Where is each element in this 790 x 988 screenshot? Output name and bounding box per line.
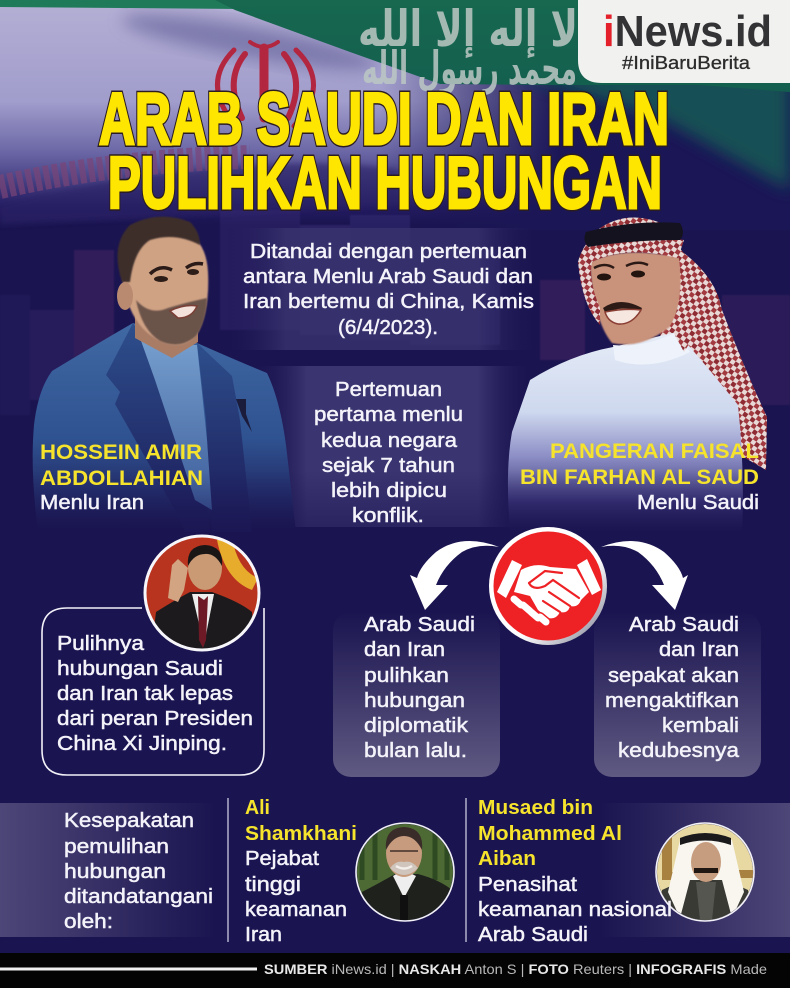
logo: iNews.id — [578, 0, 790, 83]
band intro text — [64, 809, 213, 933]
band: signatories — [0, 803, 790, 937]
caption: Iran minister: Menlu Iran — [40, 491, 144, 514]
name — [245, 796, 357, 845]
panel text: pulihkan — [364, 664, 449, 687]
pocket pen — [236, 399, 252, 432]
text: first meeting: sejak 7 tahun — [322, 454, 455, 477]
arrow: right — [601, 541, 688, 610]
callout text: dari peran Presiden — [57, 707, 253, 730]
name: Aiban — [478, 847, 536, 870]
eyes — [597, 274, 611, 280]
mouth — [605, 309, 641, 324]
panel text: dan Iran — [364, 638, 445, 661]
caption: Iran minister: HOSSEIN AMIR — [40, 441, 202, 464]
role: Penasihat — [478, 873, 577, 896]
role: keamanan — [245, 898, 347, 921]
signatory: Ali Shamkhani — [245, 796, 455, 946]
name: Musaed bin — [478, 796, 593, 819]
role — [478, 873, 672, 946]
badge circle — [489, 527, 607, 645]
logo tagline: #IniBaruBerita — [622, 53, 751, 73]
text: first meeting: Pertemuan — [335, 378, 442, 401]
text: first meeting: pertama menlu — [314, 403, 463, 426]
eyes — [150, 264, 203, 274]
icon: handshake badge — [489, 527, 607, 645]
Iran flag kufic strip — [0, 157, 250, 187]
face — [590, 252, 681, 345]
callout outline — [42, 608, 264, 775]
role: Iran — [245, 923, 282, 946]
text: first meeting — [314, 378, 463, 527]
panel text: kedubesnya — [618, 739, 740, 762]
band intro text: pemulihan — [64, 835, 169, 858]
flag fold shading — [119, 4, 381, 80]
keffiyeh left side — [578, 228, 684, 325]
text: intro: Ditandai dengan pertemuan — [250, 240, 527, 263]
text: intro — [243, 240, 534, 339]
credits: SUMBER iNews.id | NASKAH Anton S | FOTO Reuters | INFOGRAFIS Made — [264, 961, 767, 977]
signatory: Musaed bin Mohammed Al Aiban — [478, 796, 755, 946]
text: first meeting: konflik. — [352, 504, 424, 527]
callout text: hubungan Saudi — [57, 657, 223, 680]
mouth — [170, 306, 197, 318]
Iran emblem — [217, 42, 314, 126]
thobe — [508, 332, 743, 532]
panel text: Arab Saudi — [629, 613, 739, 636]
collar — [613, 332, 690, 364]
callout text: Pulihnya — [57, 632, 145, 655]
name: Ali — [245, 796, 270, 819]
callout text: China Xi Jinping. — [57, 732, 227, 755]
title — [99, 79, 669, 224]
portrait: Pangeran Faisal — [508, 217, 767, 532]
name: Mohammed Al — [478, 822, 622, 845]
caption: Saudi minister: BIN FARHAN AL SAUD — [520, 466, 759, 489]
portrait: Hossein Amir Abdollahian — [33, 217, 296, 532]
text: intro: Iran bertemu di China, Kamis — [243, 290, 534, 313]
keffiyeh back drape — [660, 240, 767, 470]
Saudi flag green field — [215, 0, 790, 92]
text: first meeting: lebih dipicu — [331, 479, 447, 502]
cuffs — [497, 559, 601, 598]
text: intro: antara Menlu Arab Saudi dan — [243, 265, 533, 288]
text: intro: (6/4/2023). — [338, 316, 438, 339]
Saudi flag calligraphy: محمد رسول الله — [362, 41, 577, 95]
photo ring — [145, 536, 259, 650]
name: Shamkhani — [245, 822, 357, 845]
Iran flag red band — [0, 163, 400, 225]
caption: Saudi minister — [520, 440, 759, 514]
panel: embassies — [594, 612, 761, 777]
panel text — [364, 613, 475, 762]
ear — [117, 282, 133, 310]
callout text — [57, 632, 253, 755]
name — [478, 796, 622, 870]
photo ring — [656, 823, 754, 921]
footer bar — [0, 953, 790, 988]
flags backdrop — [0, 0, 790, 230]
caption: Saudi minister: PANGERAN FAISAL — [550, 440, 759, 463]
panel text: Arab Saudi — [364, 613, 475, 636]
panel text: kembali — [662, 714, 739, 737]
band left — [0, 803, 216, 937]
panel text: hubungan — [364, 689, 465, 712]
neck — [135, 310, 198, 358]
centre panel backdrop — [250, 366, 535, 527]
band intro text: Kesepakatan — [64, 809, 194, 832]
panel: restored ties — [333, 612, 500, 777]
caption: Iran minister — [40, 441, 203, 514]
band right — [600, 803, 790, 937]
footer rule — [0, 968, 257, 970]
arrow: left — [410, 541, 499, 610]
Iran flag white band — [0, 0, 790, 225]
portrait bottom fade — [0, 470, 790, 532]
role: tinggi — [245, 873, 301, 896]
panel text — [605, 613, 740, 762]
Iran flag green band — [0, 0, 240, 9]
footer background — [0, 953, 790, 988]
keffiyeh right fold — [670, 246, 700, 352]
panel text: mengaktifkan — [605, 689, 739, 712]
photo: Ali Shamkhani — [357, 824, 453, 920]
band intro text: hubungan — [64, 860, 166, 883]
right side dark sky — [380, 0, 790, 230]
photo ring — [356, 823, 454, 921]
city skyline — [0, 210, 790, 415]
callout text: dan Iran tak lepas — [57, 682, 233, 705]
panel text: sepakat akan — [608, 664, 739, 687]
shirt — [135, 324, 212, 510]
band intro text: oleh: — [64, 910, 113, 933]
Saudi flag lower glow — [500, 70, 790, 190]
lapels — [106, 323, 210, 532]
Saudi flag calligraphy: لا إله إلا الله — [358, 0, 578, 59]
finger lines — [529, 571, 579, 612]
role: Arab Saudi — [478, 923, 588, 946]
suit — [33, 323, 296, 532]
knuckles — [514, 599, 546, 622]
panel text: diplomatik — [364, 714, 469, 737]
intro panel backdrop — [222, 228, 542, 350]
keffiyeh top — [600, 217, 668, 228]
Saudi flag calligraphy — [358, 0, 578, 95]
mustache — [603, 302, 642, 314]
caption: Saudi minister: Menlu Saudi — [637, 491, 759, 514]
photo: Xi Jinping — [146, 538, 258, 648]
role: keamanan nasional — [478, 898, 672, 921]
callout: Xi Jinping — [42, 530, 265, 775]
handshake glyph — [497, 559, 601, 622]
face — [123, 230, 208, 345]
panel background — [594, 612, 761, 777]
logo wordmark: iNews.id — [603, 7, 772, 56]
logo plate — [578, 0, 790, 83]
agal — [584, 222, 683, 247]
hands — [514, 565, 589, 618]
panel background — [333, 612, 500, 777]
beard — [136, 298, 207, 345]
photo: Musaed Al Aiban — [657, 824, 753, 920]
panel text: bulan lalu. — [364, 739, 467, 762]
hair — [118, 217, 200, 282]
caption: Iran minister: ABDOLLAHIAN — [40, 467, 203, 490]
band intro text: ditandatangani — [64, 885, 213, 908]
role: Pejabat — [245, 847, 319, 870]
text: first meeting: kedua negara — [321, 429, 458, 452]
panel text: dan Iran — [659, 638, 739, 661]
role — [245, 847, 347, 946]
